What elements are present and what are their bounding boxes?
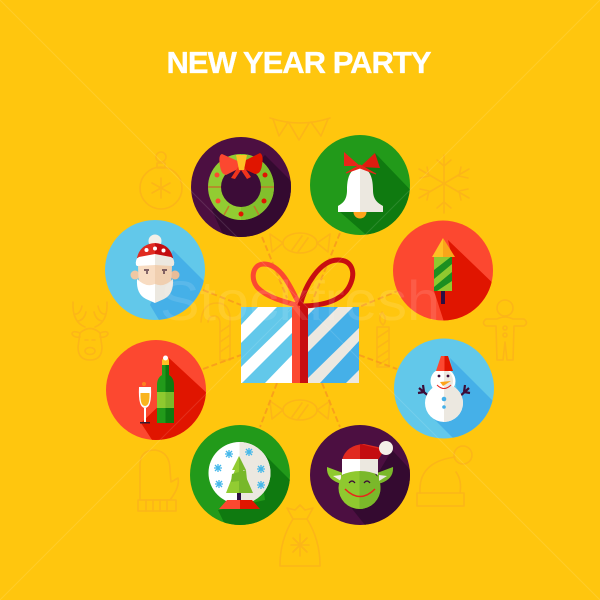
title: NEW YEAR PARTY <box>166 45 432 80</box>
watermark: Stockfresh <box>160 269 440 332</box>
badge: champagne <box>106 340 206 440</box>
wreath ring <box>208 154 274 220</box>
champagne glass <box>139 382 151 424</box>
badge: santa <box>105 220 205 320</box>
tree <box>226 456 253 500</box>
bell body <box>338 166 383 212</box>
snowman body <box>425 368 463 422</box>
bell clapper <box>354 212 366 218</box>
outline: sack <box>280 505 320 566</box>
elf hat <box>342 441 393 475</box>
background outline icons <box>72 118 526 566</box>
globe base <box>219 500 260 509</box>
rocket tip <box>432 238 455 257</box>
outline: candle <box>377 312 389 367</box>
outline: santa hat <box>417 446 472 506</box>
snowman hat <box>436 356 453 371</box>
outline: snowflake <box>419 155 469 213</box>
snowman arms <box>418 385 470 398</box>
outline: candy cane <box>201 303 230 360</box>
gift wrap <box>241 307 359 383</box>
outline: bottom candy <box>270 400 330 420</box>
gift box <box>241 260 359 383</box>
gift ribbon <box>292 307 308 383</box>
outline: gingerbread man <box>484 300 526 360</box>
elf ears <box>327 467 393 484</box>
champagne bottle <box>157 356 174 423</box>
outline: reindeer <box>72 302 108 360</box>
bell bow <box>344 152 380 174</box>
snowflakes <box>214 448 265 489</box>
rocket body <box>434 256 452 291</box>
badge: elf <box>310 425 410 525</box>
santa hat <box>136 234 174 266</box>
globe <box>208 442 270 504</box>
outline: mitten <box>138 450 178 511</box>
elf head <box>338 467 380 509</box>
badge: rocket <box>393 220 493 320</box>
gift bow <box>253 260 353 306</box>
rocket stick <box>441 291 445 304</box>
badge: wreath <box>191 137 291 237</box>
outline: top candy <box>270 233 330 253</box>
badge: snow globe <box>190 425 290 525</box>
outline: ornament <box>140 152 182 209</box>
badge: snowman <box>394 338 494 438</box>
wreath bow <box>219 153 263 179</box>
badge: bell <box>310 135 410 235</box>
outline: bunting <box>270 118 330 140</box>
dashed connectors <box>203 233 400 427</box>
santa head <box>130 265 180 303</box>
